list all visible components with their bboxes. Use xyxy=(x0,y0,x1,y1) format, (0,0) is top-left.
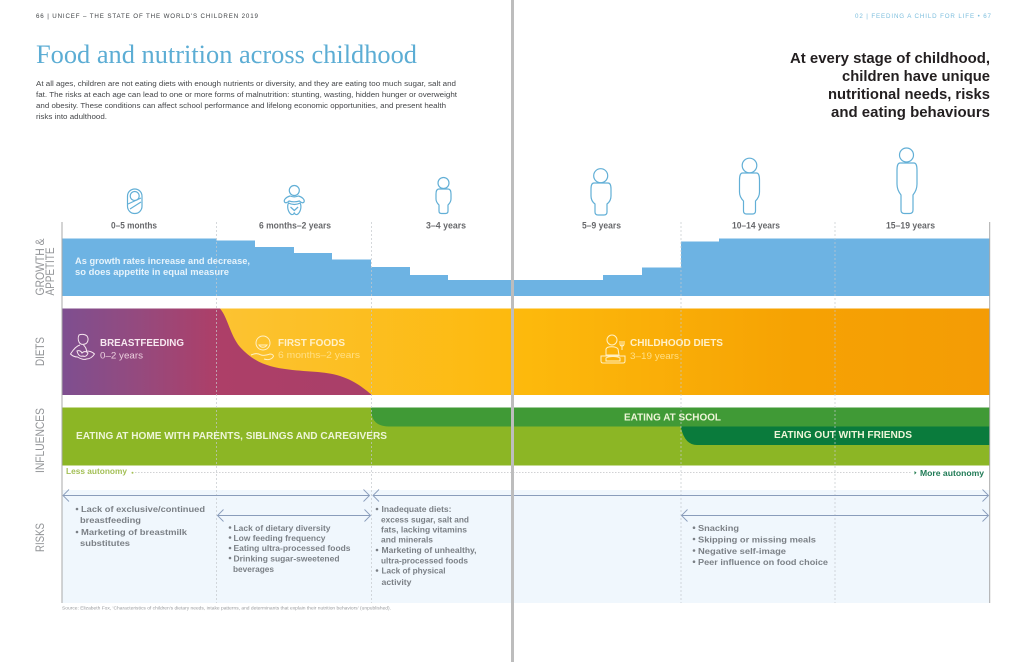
first foods label: 6 months–2 years xyxy=(278,350,360,361)
arrow: childhood risks span xyxy=(373,490,988,502)
chart axes xyxy=(62,222,990,603)
influence labels: EATING AT SCHOOL xyxy=(624,412,721,424)
row label: influences: INFLUENCES xyxy=(35,408,47,473)
key message heading: children have unique xyxy=(842,68,990,85)
risks list: 6 months-2 years: Lack of dietary diversity xyxy=(234,523,331,533)
icon: breastfeeding xyxy=(70,334,94,359)
row label: growth and appetite: APPETITE xyxy=(45,247,57,296)
key message heading: nutritional needs, risks xyxy=(828,86,990,103)
icon: child 3-4 years xyxy=(436,178,451,214)
key message heading: At every stage of childhood, xyxy=(790,50,990,67)
risks list: 6 months-2 years: Drinking sugar-sweetened xyxy=(234,554,340,564)
risks list: 3-4 years onward: Lack of physical xyxy=(382,566,446,576)
risks band background xyxy=(62,490,990,603)
risks list: 3-4 years onward: fats, lacking vitamins xyxy=(381,524,467,534)
page header left: 66 | UNICEF – THE STATE OF THE WORLD'S CHILDREN 2019 xyxy=(36,13,259,20)
childhood diets label xyxy=(630,338,723,362)
risks list: 3-4 years onward: ultra-processed foods xyxy=(381,556,468,566)
title: Food and nutrition across childhood xyxy=(36,40,417,69)
intro text: fat. The risks at each age can lead to one or more forms of malnutrition: stunting, wasting, hidden hunger or overweight xyxy=(36,90,458,99)
risks list: 0-5 months: Lack of exclusive/continued xyxy=(81,504,205,514)
risks list: 10-19 years: Peer influence on food choice xyxy=(698,557,828,567)
diets band: first foods and childhood diets xyxy=(216,308,990,395)
breastfeeding label: BREASTFEEDING xyxy=(100,338,184,349)
risks list: 3-4 years onward: Inadequate diets: xyxy=(382,504,452,514)
risks list: 3-4 years onward xyxy=(376,504,476,587)
risks list: 10-19 years: Skipping or missing meals xyxy=(698,534,816,544)
growth text: so does appetite in equal measure xyxy=(75,267,229,277)
row label: diets: DIETS xyxy=(35,337,47,366)
influence labels: EATING AT HOME WITH PARENTS, SIBLINGS AND CAREGIVERS xyxy=(76,431,387,442)
age labels: 3–4 years xyxy=(426,220,466,232)
intro text: risks into adulthood. xyxy=(36,112,107,121)
influence labels: EATING OUT WITH FRIENDS xyxy=(774,430,912,441)
risks list: 0-5 months xyxy=(76,504,205,548)
first foods label xyxy=(278,338,360,361)
icon: newborn xyxy=(128,189,142,214)
icon: childhood diets xyxy=(601,335,625,363)
key message heading xyxy=(790,50,990,121)
column guides xyxy=(216,222,835,603)
influences band: eating out xyxy=(681,426,990,445)
risks list: 6 months-2 years xyxy=(229,523,351,574)
risks list: 0-5 months: substitutes xyxy=(80,538,130,548)
arrow: first foods risks span xyxy=(218,510,370,522)
intro text xyxy=(36,79,458,121)
row label: risks: RISKS xyxy=(35,523,47,552)
arrow: adolescent risks span xyxy=(682,510,988,522)
childhood diets label: 3–19 years xyxy=(630,351,679,362)
risks list: 3-4 years onward: Marketing of unhealthy, xyxy=(382,545,476,555)
age labels: 0–5 months xyxy=(111,220,157,232)
key message heading: and eating behaviours xyxy=(831,104,990,121)
autonomy scale: More autonomy xyxy=(920,469,985,478)
row label: growth and appetite: GROWTH & xyxy=(35,238,47,296)
risks list: 0-5 months: breastfeeding xyxy=(80,515,141,525)
risks list: 10-19 years xyxy=(693,523,828,567)
row label: growth and appetite xyxy=(35,238,57,296)
risks list: 10-19 years: Negative self-image xyxy=(698,546,786,556)
risks list: 3-4 years onward: and minerals xyxy=(381,534,433,544)
intro text: At all ages, children are not eating diets with enough nutrients or diversity, and they are eating too much sugar, salt and xyxy=(36,79,456,88)
growth text xyxy=(75,256,250,277)
age labels: 6 months–2 years xyxy=(259,220,331,232)
autonomy scale xyxy=(66,467,985,478)
arrow: breastfeeding risks span xyxy=(63,490,370,502)
breastfeeding label xyxy=(100,338,184,362)
page gutter divider xyxy=(511,0,514,662)
risks list: 3-4 years onward: activity xyxy=(382,577,412,587)
icon: adolescent 15-19 years xyxy=(897,148,917,214)
risks list: 6 months-2 years: Low feeding frequency xyxy=(234,533,326,543)
age labels xyxy=(111,220,935,232)
breastfeeding label: 0–2 years xyxy=(100,350,143,362)
influences band: eating at school xyxy=(371,408,990,426)
intro text: and obesity. These conditions can affect school performance and lifelong economic opportunities, and present health xyxy=(36,101,446,110)
childhood diets label: CHILDHOOD DIETS xyxy=(630,338,723,349)
growth and appetite stepped area chart xyxy=(62,238,990,296)
growth text: As growth rates increase and decrease, xyxy=(75,256,250,266)
diets band: breastfeeding xyxy=(62,308,372,395)
age labels: 15–19 years xyxy=(886,220,935,232)
first foods label: FIRST FOODS xyxy=(278,338,345,349)
icon: first foods xyxy=(251,336,273,360)
age labels: 5–9 years xyxy=(582,220,621,232)
risks list: 6 months-2 years: Eating ultra-processed foods xyxy=(234,543,351,553)
influence labels xyxy=(76,412,912,442)
icon: child 5-9 years xyxy=(591,169,611,215)
icon: baby xyxy=(284,186,304,215)
autonomy scale: Less autonomy xyxy=(66,467,128,476)
risks list: 0-5 months: Marketing of breastmilk xyxy=(81,527,187,537)
influences band: eating at home xyxy=(62,408,990,466)
age labels: 10–14 years xyxy=(732,220,780,232)
risks list: 6 months-2 years: beverages xyxy=(233,564,274,574)
page header right: 02 | FEEDING A CHILD FOR LIFE • 67 xyxy=(855,13,992,20)
risks list: 3-4 years onward: excess sugar, salt and xyxy=(381,514,469,524)
icon: adolescent 10-14 years xyxy=(740,158,760,214)
risks list: 10-19 years: Snacking xyxy=(698,523,739,533)
source note: Source: Elizabeth Fox, 'Characteristics of children's dietary needs, intake patterns, and determinants that explain their nutrition behaviors' (unpublished). xyxy=(62,606,391,612)
